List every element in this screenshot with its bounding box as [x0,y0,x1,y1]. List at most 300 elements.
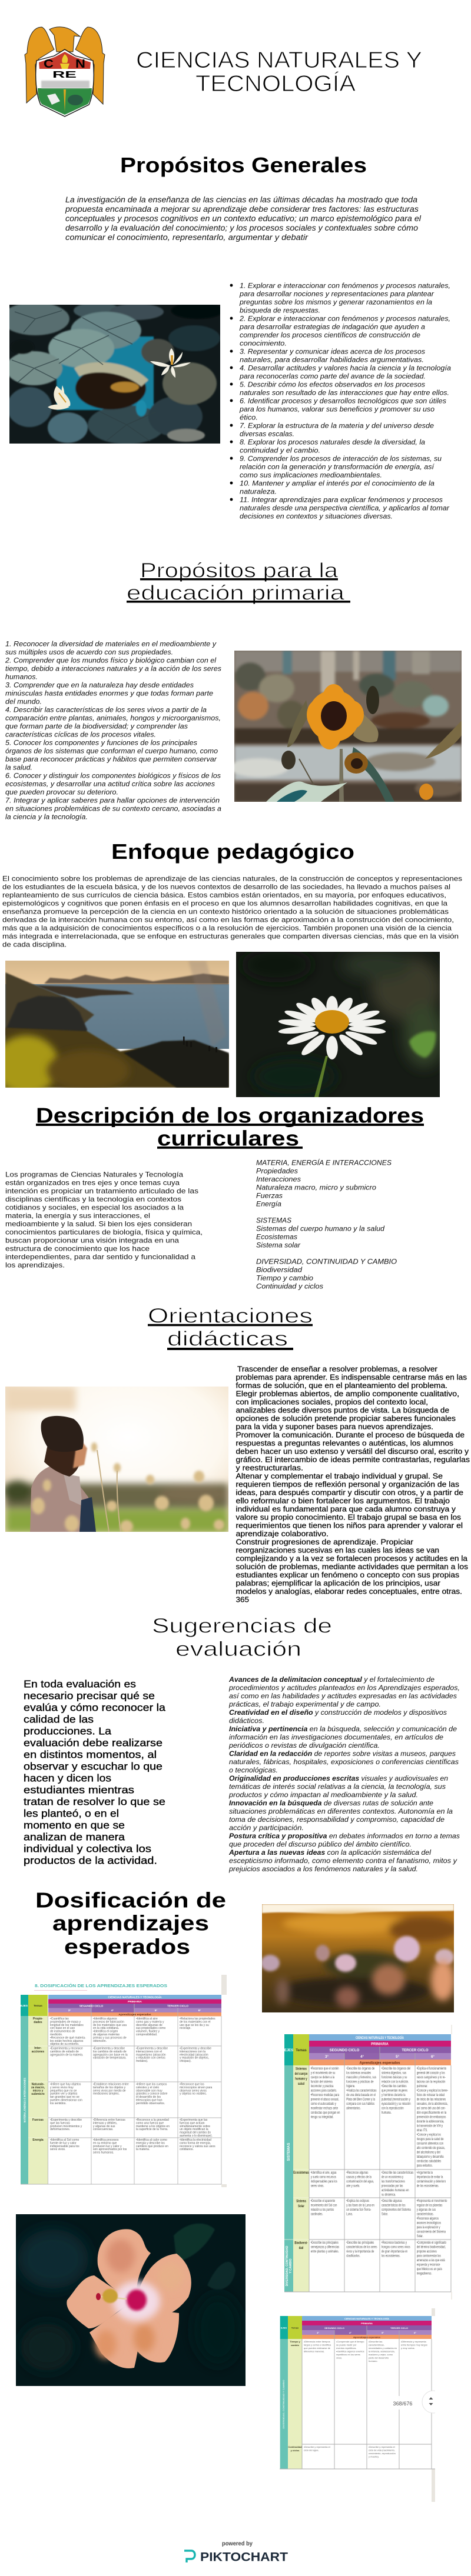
row fuerzas: simultáneamente sobre [180,2125,210,2128]
paragraph: orientaciones didácticas: valore su propio conocimiento. El trabajo grupal se basa en los [236,1514,461,1522]
row propiedades: •Identifica el origen [93,2030,118,2034]
body text: humana. [382,2111,392,2115]
body text: tabaquismo y desarrolla [417,2155,444,2159]
header labels: Aprendizajes esperados [118,2013,151,2017]
leaf veins [12,311,156,441]
row fuerzas: deformaciones. [50,2128,70,2131]
list: primary purposes: humanos. [5,672,38,681]
list: criterios de evaluación: prácticas, el trabajo experimental y de campo. [228,1700,381,1708]
body text: crecimiento, reproducción [369,2452,396,2455]
theme names: y ciclos [291,2449,300,2452]
list: general purposes [230,281,451,520]
row energía: cambios que produce en [136,2145,168,2148]
body text: megadiverso. [417,2272,432,2276]
row energía: indispensable para los [50,2145,79,2148]
axis label: diversidad [286,2245,293,2286]
list: criterios de evaluación: o tecnológicas. [229,1766,278,1774]
body text: Sistema [296,2200,306,2204]
body text: •Describe y representa el [304,2445,330,2448]
list: general purposes: 11. Integrar aprendizajes para explicar fenómenos y procesos [240,495,443,504]
paragraph: organizadores: están organizados en tres ejes y once temas cuya [5,1179,180,1187]
list: ejes y temas: Ecosistemas [256,1233,297,1241]
theme names: cambio [291,2344,300,2347]
body text: Solar [298,2204,304,2208]
title: TECNOLOGÍA [195,71,356,96]
row interacciones: •Experimenta y describe [93,2047,125,2051]
list: ejes y temas: SISTEMAS [256,1217,291,1225]
row energía: seres humanos. [93,2151,114,2155]
body text: •Diferencia entre tiempos [304,2340,330,2343]
photo: hibiscus [16,2214,246,2386]
row propiedades: longitud de los materiales [50,2024,84,2027]
beanie [41,1416,84,1452]
small sunflowers [344,752,368,774]
body text: de gran importancia en [382,2250,407,2254]
body text: relación a los puntos [311,2208,334,2212]
list: primary purposes: minúsculas hasta entidades enormes y que todas forman parte [5,689,213,697]
axis label: MATERIA, ENERGÍA E INTERACCIONES [22,2078,26,2122]
body text: Sistemas [296,2067,307,2071]
body text: ciclo del agua. [304,2448,319,2452]
axis label: diversidad: DIVERSIDAD, CONTINUIDAD [286,2245,289,2286]
row energía: energía y describe los [136,2141,165,2145]
body text: actividades humanas en [382,2188,409,2192]
body text: •Conoce y explica los bene- [417,2089,448,2093]
paragraph: organizadores: interdependientes, para dar sentido y funcionalidad a [5,1253,195,1261]
row energía: reconoce y valora sus usos [180,2145,215,2148]
header labels: 4° [360,2055,364,2059]
row fuerzas: que las fuerzas [50,2121,70,2125]
list: general purposes: naturales desde una perspectiva científica, y aplicarlos al tomar [240,504,450,512]
list: criterios de evaluación: Claridad en la redacción de reportes sobre visitas a museos, parques [229,1749,456,1758]
photo: woman in field [5,1387,228,1532]
list: general purposes: para reconocerlas como parte del avance de la sociedad. [239,372,426,380]
paragraph: organizadores [5,1171,203,1269]
row fuerzas: como una fuerza que [136,2121,164,2125]
paragraph: enfoque: de los estudiantes de la escuela básica, y de los nuevos contextos de desarrollo de las sociedades, ha llevado a muchos países al [2,883,450,891]
header labels: Temas [291,2326,299,2330]
paragraph: enfoque: epistemológicos y cognitivos que ponen énfasis en el proceso en que los alumnos desarrollan habilidades cognitivas, en que la [2,899,447,908]
body text: •Comprende que el tiempo [336,2340,364,2343]
row fuerzas: y algunas de sus [93,2125,115,2128]
page edge strips [221,1975,227,1995]
row naturaleza: pequeños que no se [50,2089,77,2092]
paragraph: evaluación (large): individual y colectiva los [24,1843,151,1855]
body text: expuesta y reconoce [417,2263,440,2267]
paragraph: orientaciones didácticas: Construir progresiones de aprendizaje. Propiciar [236,1538,413,1547]
header labels: SEGUNDO CICLO [79,2005,104,2008]
body text: y muy cortos. [401,2347,415,2350]
row propiedades: propiedades de masa y [50,2020,81,2024]
body text: pubertad (menstruación y [382,2098,410,2102]
body text: •Reconoce algunos [417,2217,439,2221]
petals [277,996,387,1059]
list: general purposes: relación con la generación y transformación de energía, así [240,462,435,471]
list: ejes y temas: Interacciones [256,1175,301,1184]
list: criterios de evaluación: Creatividad en el diseño y construcción de modelos y dispositivos [229,1708,447,1717]
lower hill [5,1028,229,1088]
list: general purposes: 4. Desarrollar actitudes y valores hacia la ciencia y la tecnología [240,364,451,372]
paragraph: evaluación (large): En toda evaluación es [24,1678,136,1690]
row fuerzas: un objeto modifican la [180,2128,208,2131]
row propiedades: de instrumentos de [50,2030,75,2034]
row propiedades: con base en el uso [50,2027,75,2030]
row naturaleza: seres vivos por medio de [93,2089,126,2092]
row naturaleza: los sentidos. [50,2102,67,2105]
row interacciones: •Experimenta y describe [180,2047,211,2051]
page counter pill [388,2396,417,2410]
header labels: TERCER CICLO [390,2327,408,2330]
body text: Solar. [382,2212,388,2217]
body text: seres vivos. [311,2184,324,2188]
list: general purposes: 7. Explorar la estructura de la materia y del universo desde [240,421,434,429]
side columns [280,2316,288,2339]
body text: y hombres durante la [382,2093,406,2097]
body text: características de los [382,2204,406,2208]
body text: dón específicamente en la [417,2111,446,2115]
row propiedades: uso que se les da y su [180,2024,209,2027]
body text: humano. [369,2360,378,2362]
list: criterios de evaluación: Apertura a las nuevas ideas con la aplicación sistemática del [228,1848,431,1857]
body text: •Comprende el significado [417,2241,446,2245]
body text: ficios de retrasar la edad [417,2093,445,2097]
row interacciones: los cambios de estado de [93,2050,127,2054]
list: criterios de evaluación: que proceden del discurso público del ámbito científico. [229,1840,412,1848]
row fuerzas: mantiene a los objetos en [136,2125,170,2128]
row naturaleza: permitido observarlos. [136,2102,165,2105]
list: general purposes: continuidad y el cambio. [240,446,320,454]
body text: •Conoce y explica los [417,2133,441,2137]
list: primary purposes: del mundo. [5,697,42,705]
header labels: EJES [21,2004,28,2008]
heading: descripción de los organizadores curriculares: Descripción de los organizadores [36,1103,424,1127]
body text: función del sistema [311,2080,333,2084]
body text: regular de los planetas [417,2204,443,2208]
body text: higiene. [346,2084,355,2088]
row fuerzas: intensas y débiles, [93,2121,117,2125]
body text: •Describe los órganos de [346,2067,374,2071]
body text: con la reproducción [382,2107,404,2111]
paragraph: orientaciones didácticas: problemas para aprender. Es indispensable centrarse más en las [236,1374,467,1382]
body text: laciona con la respiración [417,2080,446,2084]
list: criterios de evaluación: procedimientos y actitudes planteados en los Aprendizajes esperados, [228,1684,460,1692]
shield green band [38,88,92,115]
row propiedades: obtención. [93,2040,107,2043]
paragraph: organizadores: Los programas de Ciencias Naturales y Tecnología [5,1171,183,1179]
heading: propósitos para la educación primaria [127,559,350,604]
letters: C [44,58,54,71]
body text: •Reconoce algunas [346,2171,369,2175]
body text: masculino y femenino, sus [346,2075,376,2080]
row fuerzas [50,2118,213,2138]
list: ejes y temas: Tiempo y cambio [256,1274,313,1282]
row interacciones: interacciones con el [136,2050,162,2054]
row fuerzas: •Experimenta que las [180,2118,208,2122]
body text: Ecosistemas [293,2171,309,2175]
theme names: acciones [32,2050,44,2054]
list: criterios de evaluación: situaciones problemáticas en diferentes contextos. Autonomía en la [229,1807,453,1815]
body text: Plato del Bien Comer y la [346,2098,375,2102]
paragraph: orientaciones didácticas: ideas, para después compartir y discutir con otros, y a partir de [236,1489,463,1497]
title [136,48,422,96]
list: ejes y temas: DIVERSIDAD, CONTINUIDAD Y CAMBIO [256,1258,397,1266]
body text: características. [417,2212,434,2217]
list: ejes y temas: Energía [256,1200,281,1208]
theme names: Fuerzas [32,2118,44,2122]
body text: general del corazón y los [417,2071,445,2075]
body text: •Describe las características [382,2171,414,2175]
heading: propósitos para la educación primaria: Propósitos para la [140,559,339,582]
header labels: CIENCIAS NATURALES Y TECNOLOGÍA [356,2035,404,2040]
header labels: 5° [155,2009,157,2012]
body text: sexuales, de la abstinencia, [417,2102,448,2106]
hoodie [30,1465,94,1532]
body text: y muerte). [369,2455,379,2458]
paragraph: orientaciones didácticas: aprendizaje colaborativo. [236,1530,329,1538]
heading: dosificación de aprendizajes esperados: aprendizajes [52,1911,209,1935]
body text: alimentarios. [346,2107,361,2111]
header labels: 4° [111,2009,114,2012]
body text: la infancia, adolescencia, [369,2350,395,2353]
bullets [230,284,233,501]
footer: powered by piktochart: powered by [222,2541,253,2547]
row naturaleza: y seres vivos muy [50,2086,74,2090]
body text: necesidades y cuidados en [369,2347,397,2350]
body text: provocadas por las [382,2184,403,2188]
body text: humano y [295,2077,307,2081]
table image 1: dosificación, materia energía e interacciones [21,1975,227,2187]
paragraph: orientaciones didácticas: con implicaciones sociales, propios del contexto local, [236,1398,428,1407]
row energía: son aprovechados por los [93,2148,127,2151]
row naturaleza: microscopios sirven para [180,2086,213,2090]
body text: conductas que pongan en [311,2111,340,2115]
list: primary purposes: 5. Conocer los componentes y funciones de los principales [5,738,197,747]
paragraph: evaluación (large): les planteó, o en el [24,1808,119,1819]
right leaf [425,721,462,759]
body text: •Representa el movimiento [417,2199,447,2203]
body text: de una dieta basada en el [346,2093,376,2097]
body text: Solar. [417,2234,423,2238]
body text: prevención de embarazos [417,2115,446,2120]
row propiedades: procesos de fabricación [93,2020,124,2024]
paragraph: orientaciones didácticas: para la vida y suponer bases para nuevos aprendizajes. [236,1423,433,1431]
body text: que pueden estimarse de [304,2347,331,2350]
header labels: 3° [325,2055,329,2059]
list: primary purposes: órganos de los sistemas que conforman el cuerpo humano, como [5,747,218,755]
header labels: EJES [281,2326,287,2330]
header labels: 6° [414,2331,416,2334]
header labels: 3° [317,2331,319,2334]
paragraph: orientaciones didácticas: Trascender de enseñar a resolver problemas, a resolver [237,1365,437,1374]
row naturaleza: observar seres vivos [180,2089,207,2092]
intro paragraph: comunicar el conocimiento, representarlo, argumentar y debatir [65,233,309,242]
paragraph: enfoque: El conocimiento sobre los problemas de aprendizaje de las ciencias naturales, de la construcción de conceptos y representaciones [2,875,462,883]
page edge strips [432,2308,435,2316]
grid [284,2047,451,2292]
list: general purposes: 2. Explorar e interaccionar con fenómenos y procesos naturales, [239,314,450,322]
row propiedades: reciclaje. [180,2027,191,2030]
row energía: cotidianos. [180,2148,194,2151]
eagle head and neck [49,27,80,52]
heading: enfoque pedagógico: Enfoque pedagógico [111,839,354,864]
list: general purposes: 1. Explorar e interaccionar con fenómenos y procesos naturales, [240,281,450,289]
body text: alto contenido de grasas, [417,2146,445,2150]
row energía: en su entorno que [93,2141,117,2145]
list: general purposes: diversas escalas. [240,429,294,438]
row energía [50,2138,215,2155]
list: primary purposes: 6. Conocer y distinguir los componentes biológicos y físicos de los [5,771,221,779]
row fuerzas: aumenta o lo disminuye). [180,2134,213,2138]
header bands [302,2316,432,2321]
row propiedades: primas y sus procesos de [93,2036,127,2040]
row fuerzas: •Experimenta y describe [50,2118,82,2122]
row propiedades: medición. [50,2033,62,2037]
list: primary purposes: sus múltiples usos de acuerdo con sus propiedades. [5,648,173,656]
hanging leaf [287,700,309,747]
face [73,1435,87,1468]
building [41,81,89,88]
body text: aire y suelo. [346,2184,360,2188]
theme names: Tiempo y [290,2340,301,2343]
list: general purposes: decisiones en contextos y situaciones diversas. [240,512,393,520]
body text: y algunas de sus [417,2208,436,2212]
body text: sistema digestivo, sus [382,2071,407,2075]
body text: como el autocuidado y [311,2102,336,2106]
row naturaleza: mediciones simples. [93,2092,120,2096]
body text: componentes del Sistema [382,2208,411,2212]
body text: de un ecosistema y [382,2175,403,2180]
list: primary purposes: 1. Reconocer la diversidad de materiales en el medioambiente y [5,639,217,648]
header labels: 6° [198,2009,201,2012]
body text: movimiento del Sol con [311,2204,337,2208]
row naturaleza [50,2082,213,2105]
list: primary purposes: 2. Comprender que los mundos físico y biológico cambian con el [5,656,216,664]
list: ejes y temas: Naturaleza macro, micro y submicro [256,1184,376,1192]
header labels: SEGUNDO CICLO [330,2049,360,2052]
list: criterios de evaluación: Avances de la delimitacion conceptual y el fortalecimiento de [228,1675,434,1684]
body text: hongos como seres vivos [382,2245,410,2250]
body text: la transmisión de VIH y [417,2124,443,2128]
row naturaleza: pueden ver y objetos [50,2092,78,2096]
row propiedades: en la vida cotidiana. [93,2027,119,2030]
paragraph: evaluación (large): necesario precisar qué se [24,1690,155,1702]
list: primary purposes: características cíclicas de los procesos vitales. [5,730,156,738]
body text: funciones básicas y su [382,2075,407,2080]
body text: pulmonar. [417,2084,428,2088]
photo: flowers at sunset [262,1904,454,2012]
body text: •Describe los órganos del [382,2067,410,2071]
row propiedades: objetos de su entorno. [50,2042,79,2046]
body text: •Explica el funcionamiento [417,2067,446,2071]
body text: de los ecosistemas. [417,2184,439,2188]
body text: •Reconoce bacterias y [382,2241,407,2245]
list: general purposes: comprender los procesos científicos de construcción de [240,331,420,339]
header labels: TERCER CICLO [167,2005,188,2008]
paragraph: evaluación (large): en distintos momentos, al [24,1749,157,1761]
paragraph: orientaciones didácticas: complejizando y a la vez se fortalecen procesos y actitudes en la [236,1555,467,1563]
paragraph: orientaciones didácticas: palabras; ejemplificar la aplicación de los principios, usar [236,1579,440,1588]
paragraph: orientaciones didácticas: respuestas a preguntas relevantes o auténticas, los alumnos [236,1439,453,1448]
body text: otras ITS. [417,2128,427,2132]
body text: conocimiento del Sistema [417,2230,446,2234]
body text: eyaculación) y su relación [382,2102,411,2106]
row naturaleza: •Reconoce que los [180,2082,204,2086]
body text: vivos. [336,2357,342,2359]
body text: para evitarlos. [417,2164,433,2168]
paragraph: organizadores: materia, la energía y sus interacciones, el [5,1212,150,1220]
paragraph: orientaciones didácticas: requieren tiempos de reflexión personal y organización de las [236,1481,459,1489]
header labels: 3° [68,2009,71,2012]
theme names: za macro, [31,2086,45,2090]
intro paragraph: propuesta encaminada a mejorar su aprendizaje debe considerar tres factores: las estructuras [65,205,419,214]
body text: características, [369,2344,384,2346]
row propiedades: •Identifica algunos [93,2017,117,2021]
body text: se puede medir por [336,2344,357,2346]
paragraph: evaluación (large): tratan de resolver lo que se [24,1796,165,1808]
body text: •Describe y representa el [369,2445,395,2448]
body text: así como del uso del con- [417,2107,446,2111]
paragraph: orientaciones didácticas [236,1365,470,1604]
table image 3: diversidad, continuidad y cambio [280,2308,445,2502]
paragraph: orientaciones didácticas: ello reformular o bien fortalecer los argumentos. El trabajo [236,1497,450,1505]
dark leaves [174,2224,215,2262]
body text: entre plantas y animales. [311,2250,339,2254]
body text: causas y efectos de la [346,2175,372,2180]
row naturaleza: celestes y el cielo [136,2086,159,2090]
row naturaleza: y objetos no visibles. [180,2092,207,2096]
list: general purposes: búsqueda de respuestas. [240,306,320,314]
header labels: CIENCIAS NATURALES Y TECNOLOGÍA [344,2317,389,2320]
paragraph: orientaciones didácticas: modelos y analogías, elaborar redes conceptuales, entre otras. [236,1588,462,1596]
row interacciones: y repulsión con ciertos [136,2057,165,2060]
row interacciones: electricidad (atracción [180,2053,208,2057]
body text: contaminación y deterioro [417,2180,446,2184]
heading: sugerencias de evaluación [152,1615,332,1661]
heading: propósitos para la educación primaria: educación primaria [127,581,345,604]
blurred field flowers [32,1442,224,1533]
paragraph: evaluación (large) [24,1678,165,1867]
side columns [284,2034,293,2065]
body text: •Argumenta la [417,2171,433,2175]
row naturaleza: el desarrollo de los [136,2095,161,2099]
list: general purposes: para desarrollar estrategias de indagación que ayuden a [239,322,425,331]
list: primary purposes: que pueden provocar su deterioro. [5,788,118,796]
body text: cardinales. [311,2212,323,2217]
body text: •Describe el aparente [311,2199,335,2203]
row naturaleza: tan grandes que no se [50,2095,79,2099]
paragraph: evaluación (large): observar y escuchar lo que [24,1761,162,1772]
body text: vivos y la importancia de [346,2250,374,2254]
theme names: Inter- [34,2047,42,2050]
list: primary purposes: 3. Comprender que en la naturaleza hay desde entidades [5,681,194,689]
row propiedades: •Reconoce de qué materia- [50,2036,86,2040]
row fuerzas: producen movimientos y [50,2125,82,2128]
body text: •Describe algunas [382,2199,402,2203]
row interacciones: •Experimenta y describe [136,2047,168,2051]
body text: los ecosistemas. [382,2254,400,2258]
list: general purposes: 10. Mantener y ampliar el interés por el conocimiento de la [240,479,434,487]
list: criterios de evaluación: toma de decisiones, responsabilidad y compromiso, capacidad de [229,1815,445,1824]
list: general purposes: naturales, para desarrollar habilidades argumentativas. [240,355,424,364]
body text: relación con la nutrición. [382,2080,409,2084]
list: primary purposes: 7. Integrar y aplicar saberes para hallar opciones de intervención [5,796,220,804]
list: primary purposes: comparación entre plantas, animales, hongos y microorganismos, [5,714,221,722]
list: general purposes: naturaleza. [240,487,277,495]
row energía: •Identifica al calor como [136,2138,167,2142]
body text: vasos sanguíneos y lo re- [417,2075,446,2080]
row propiedades: compresibilidad. [136,2033,157,2037]
row propiedades: como gas y materia y [136,2020,164,2024]
